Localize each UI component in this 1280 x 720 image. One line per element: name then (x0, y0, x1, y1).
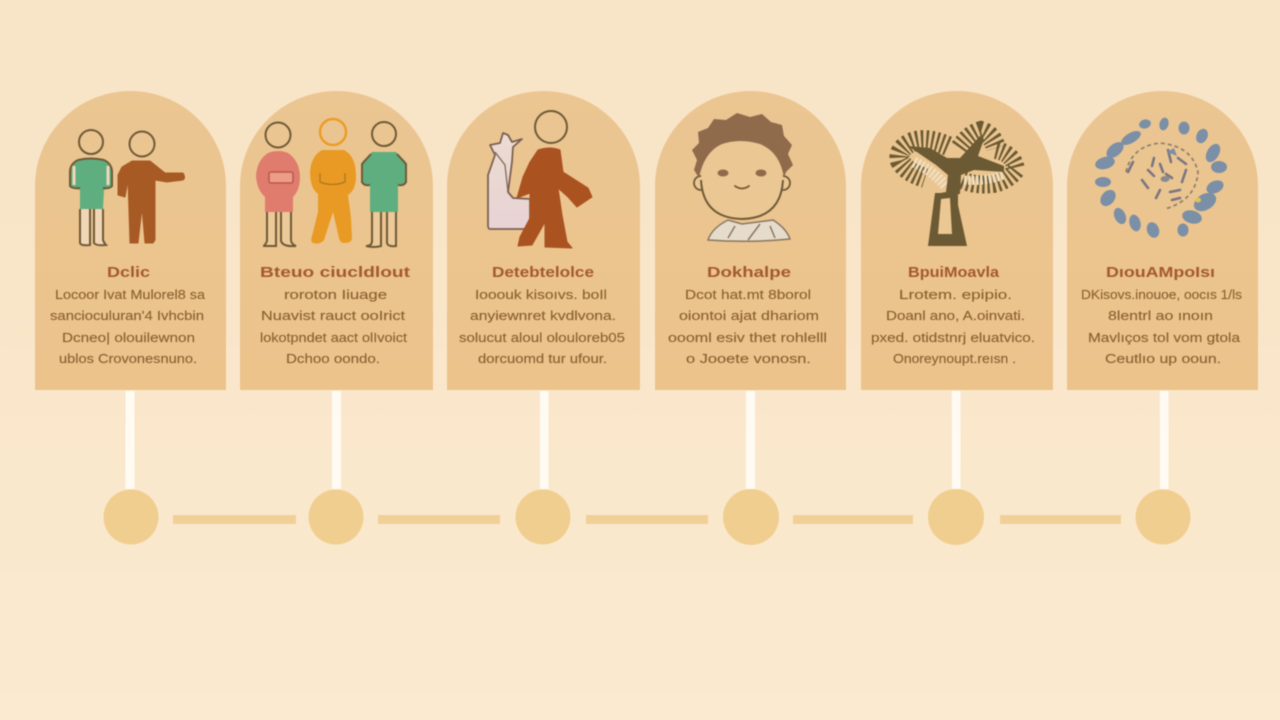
text block (459, 287, 625, 366)
panel: stage 3 (447, 91, 640, 390)
timeline links (173, 515, 1121, 524)
text block: oiontoi ajat dhariom (679, 308, 819, 323)
icon: two people (70, 130, 184, 245)
text block: oooml esiv thet rohlelll (668, 330, 827, 345)
text block: Lrotem. epipio. (899, 287, 1012, 302)
panel: stage 4 (655, 91, 846, 390)
text block: Iooouk kisoıvs. boIl (475, 287, 607, 302)
timeline nodes (104, 489, 1190, 545)
text block: ublos Crovonesnuno. (59, 351, 197, 366)
icon: tree (899, 131, 1016, 246)
text block: Doanl ano, A.oinvati. (886, 308, 1025, 323)
text block: sancioculuran'4 Ivhcbin (50, 308, 204, 323)
text block: Dcneo| olouilewnon (62, 330, 195, 345)
text block: DKisovs.inouoe, oocıs 1/ls (1081, 287, 1243, 302)
text block: Dchoo oondo. (286, 351, 380, 366)
text block (50, 287, 206, 366)
text block: anyiewnret kvdlvona. (470, 308, 616, 323)
text block: lokotpndet aact olIvoict (260, 330, 407, 345)
text block: Nuavist rauct ooIrict (261, 308, 405, 323)
text block (871, 287, 1035, 366)
heading: Dokhalpe (707, 264, 791, 281)
text block (1081, 287, 1243, 366)
text block: pxed. otidstnrj eluatvico. (871, 330, 1035, 345)
text block (668, 287, 827, 366)
text block: 8lentrl ao ınoın (1108, 308, 1213, 323)
icon: three people (256, 119, 406, 247)
text block: Ceutlıo up ooun. (1105, 351, 1221, 366)
heading: Bteuo ciucldlout (260, 264, 410, 281)
panel: stage 5 (861, 91, 1053, 390)
text block (260, 287, 407, 366)
icon: walking figure with sack (488, 111, 592, 248)
panel: stage 6 (1067, 91, 1258, 390)
panel: stage 1 (35, 91, 226, 390)
panel: stage 2 (240, 91, 433, 390)
icon: spiral of dots (1094, 117, 1227, 240)
text block: solucut aloul olouloreb05 (459, 330, 625, 345)
heading: Dclic (107, 264, 150, 281)
heading: DıouAMpoIsı (1106, 264, 1215, 281)
connector stems (126, 391, 1168, 489)
heading: Detebtelolce (492, 264, 594, 281)
heading: BpuiMoavla (908, 264, 1000, 281)
text block: dorcuomd tur ufour. (478, 351, 607, 366)
icon: child portrait (692, 113, 793, 241)
text block: Locoor Ivat Mulorel8 sa (55, 287, 206, 302)
text block: Mavlıços tol vom gtola (1088, 330, 1241, 345)
text block: o Jooete vonosn. (686, 351, 811, 366)
text block: Onoreynoupt.reısn . (893, 351, 1016, 366)
text block: Dcot hat.mt 8borol (685, 287, 811, 302)
text block: roroton Iiuage (284, 287, 387, 302)
